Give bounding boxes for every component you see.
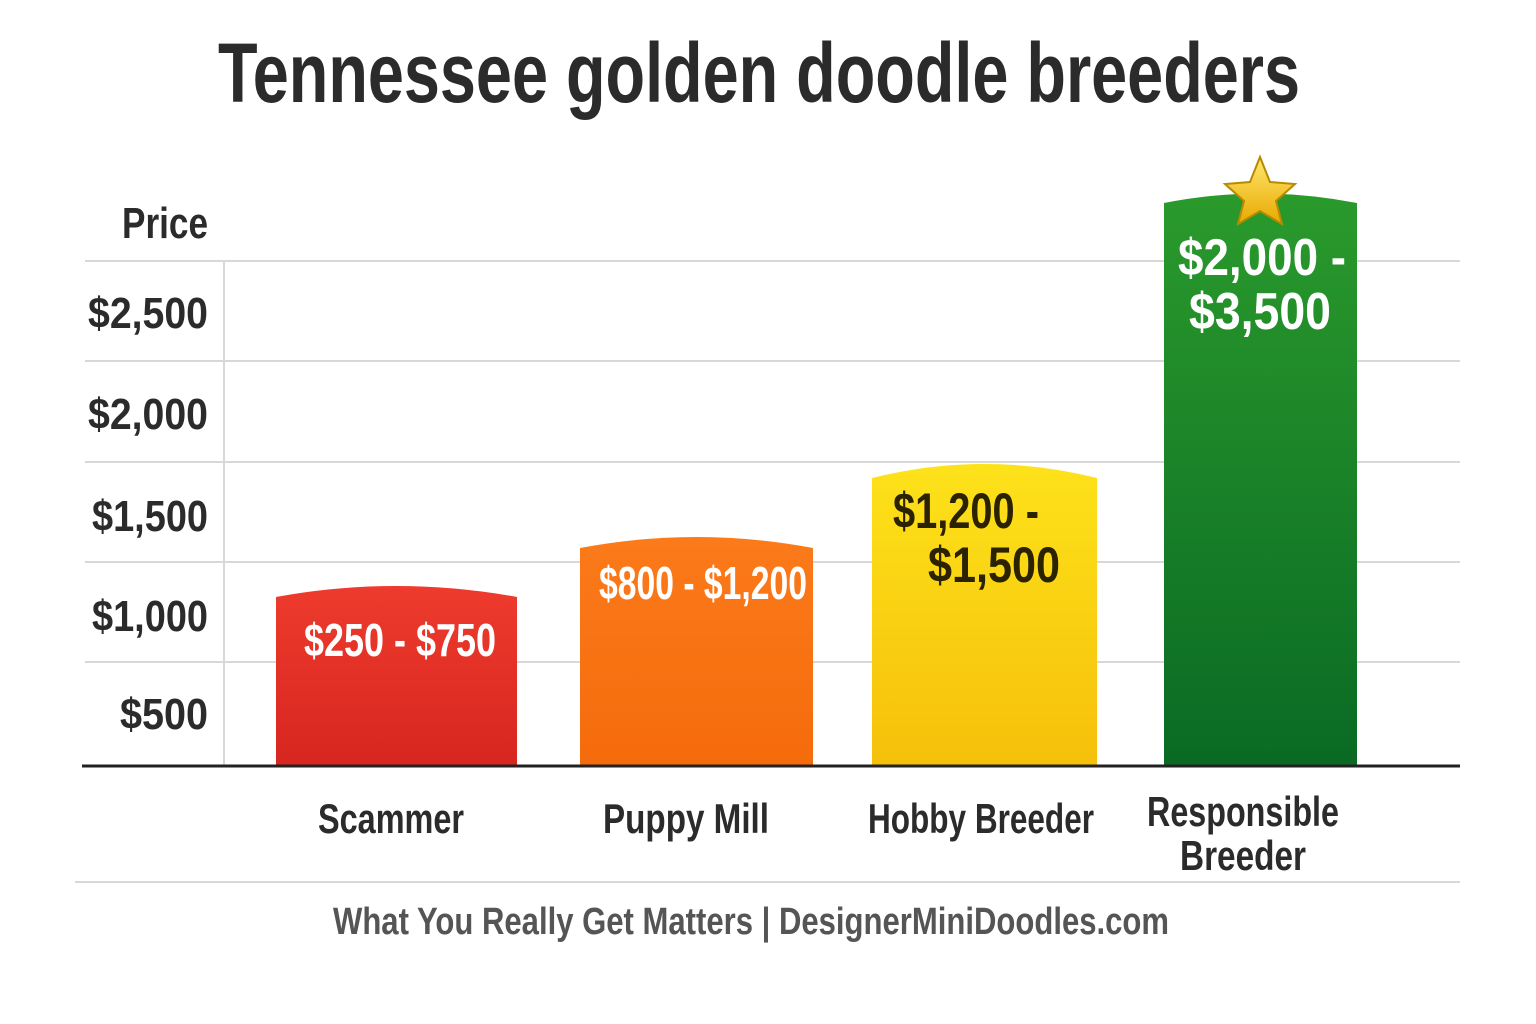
bar: Puppy Mill: $800 - $1,200 (599, 557, 807, 609)
bar: Scammer: $250 - $750 (304, 614, 496, 666)
y axis labels: $2,500 (88, 289, 208, 338)
icon: star (1225, 157, 1295, 224)
bar: Scammer (276, 586, 517, 766)
y axis labels: $2,000 (88, 390, 208, 439)
category labels: Puppy Mill (603, 795, 769, 842)
baseline (82, 764, 1460, 768)
category labels: Breeder (1180, 832, 1306, 879)
y axis labels: $500 (120, 690, 208, 739)
footer: What You Really Get Matters | DesignerMiniDoodles.com (333, 901, 1169, 943)
category labels (318, 788, 1339, 879)
bar: Hobby Breeder: $1,200 - (893, 483, 1039, 539)
bar: Responsible Breeder (1164, 194, 1357, 766)
bar: Hobby Breeder: $1,500 (928, 537, 1060, 593)
category labels: Responsible (1147, 788, 1339, 835)
grid lines (85, 261, 1460, 766)
y axis labels: $1,000 (92, 592, 208, 641)
bar: Responsible Breeder: $2,000 - (1178, 229, 1346, 287)
axis title: Price: Price (122, 199, 208, 248)
bar: Puppy Mill (580, 537, 813, 766)
y axis labels: $1,500 (92, 492, 208, 541)
bar: Hobby Breeder (872, 464, 1097, 766)
category labels: Hobby Breeder (868, 795, 1094, 842)
y axis labels (88, 289, 208, 739)
bar: Responsible Breeder: $3,500 (1189, 283, 1331, 341)
category labels: Scammer (318, 795, 464, 842)
